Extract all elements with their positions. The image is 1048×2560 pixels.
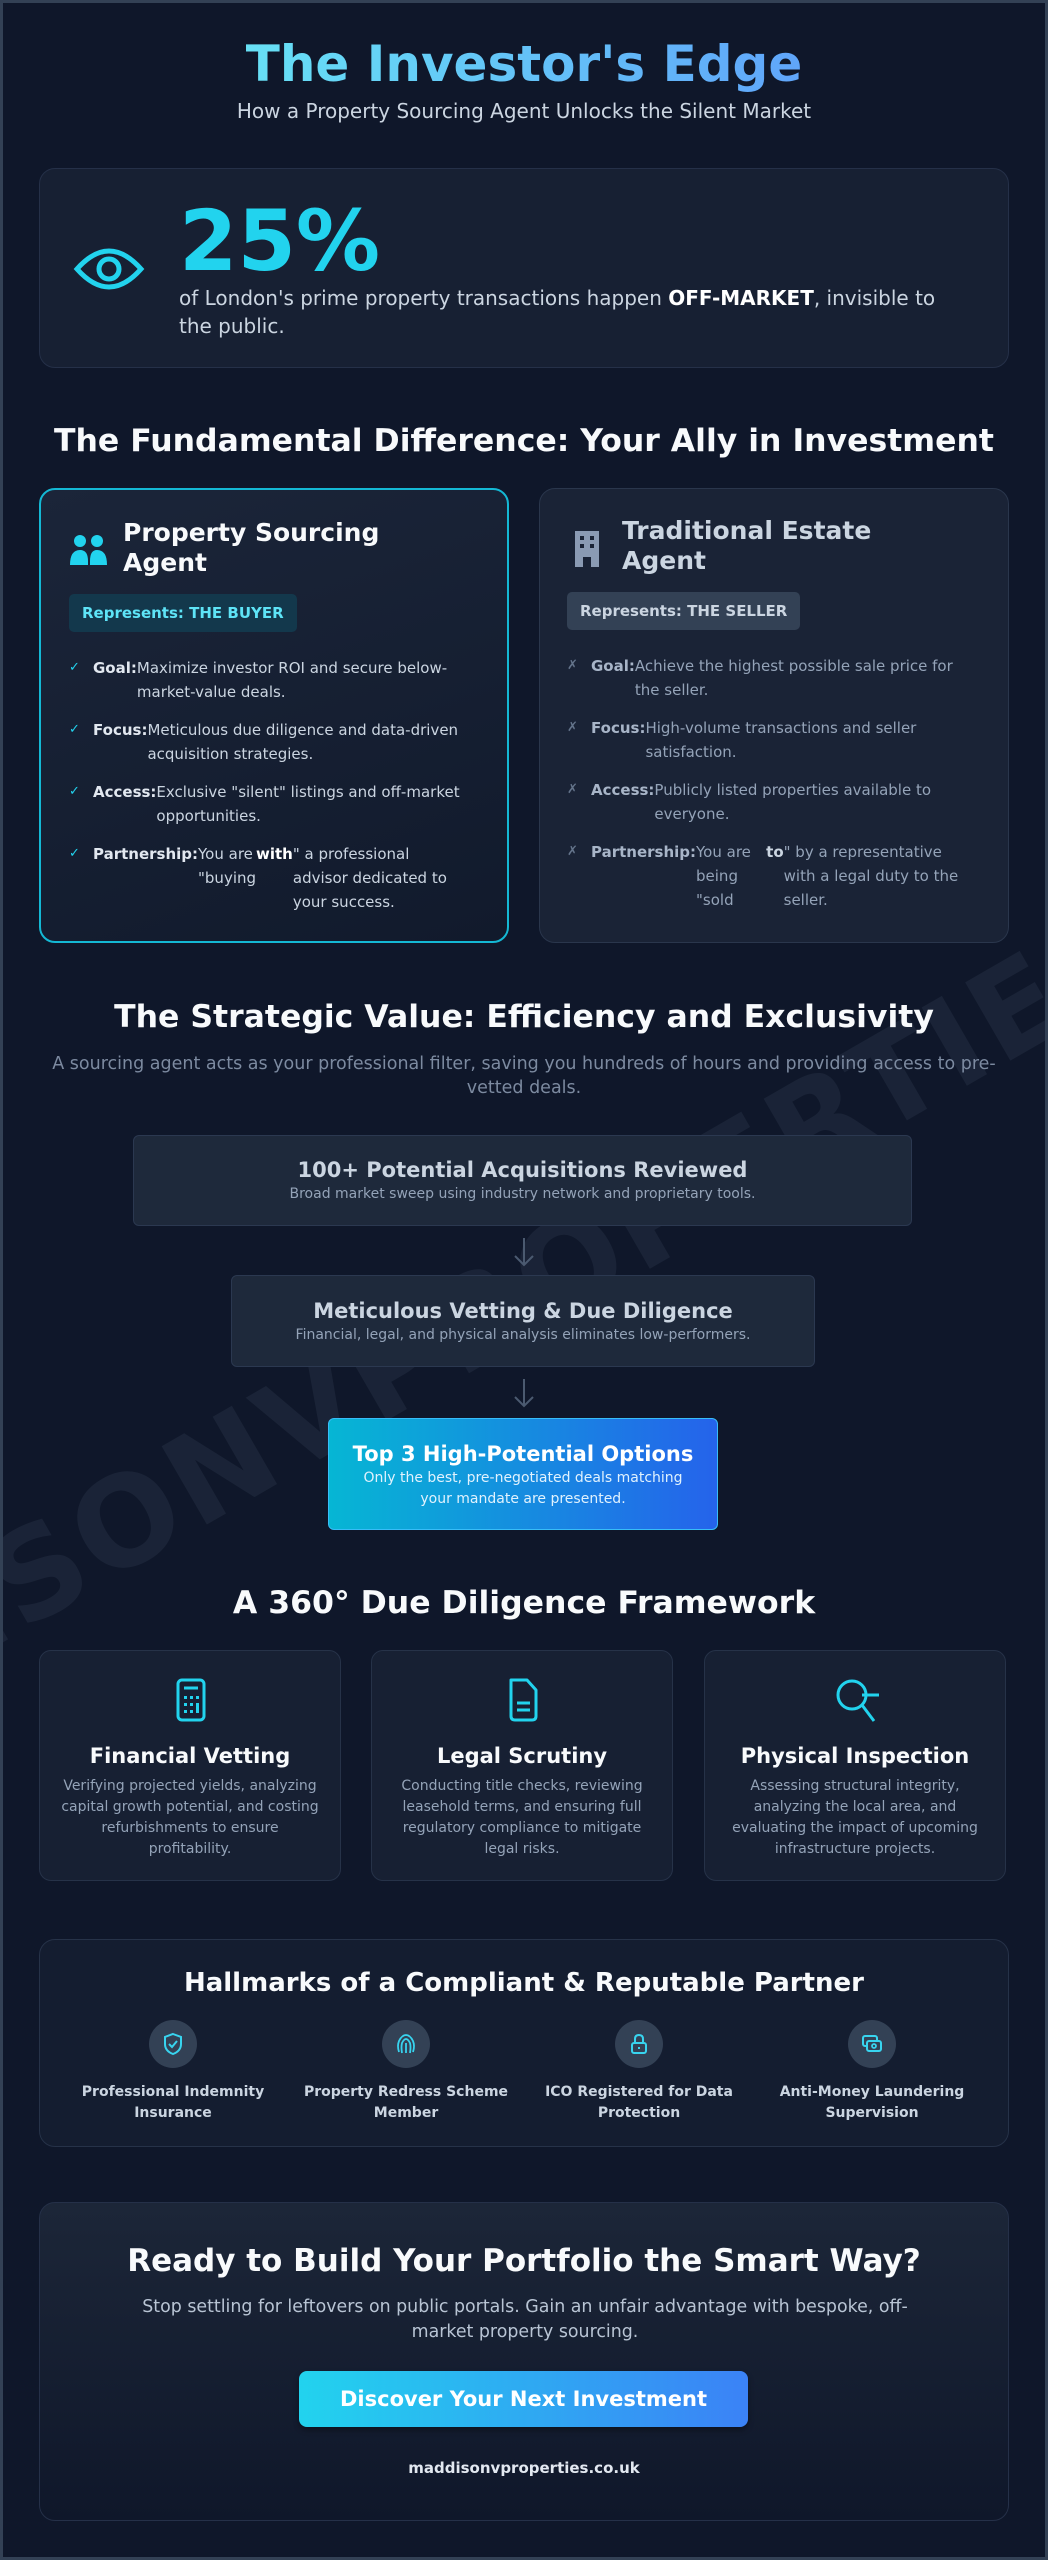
panel: traditional estate agent bbox=[539, 488, 1009, 943]
hallmark: redress scheme bbox=[304, 2020, 508, 2121]
icon: search bbox=[836, 1680, 879, 1722]
list: buyer benefits: Maximize investor ROI and secure below-market-value deals. bbox=[137, 659, 447, 701]
badge: Represents: THE SELLER bbox=[580, 602, 787, 620]
subtitle: How a Property Sourcing Agent Unlocks the Silent Market bbox=[237, 99, 811, 123]
card: legal scrutiny bbox=[371, 1650, 673, 1881]
heading: 360 framework: A 360° Due Diligence Framework bbox=[233, 1585, 815, 1621]
icon: document bbox=[510, 1678, 538, 1722]
list: seller focus: Achieve the highest possible sale price for the seller. bbox=[635, 657, 953, 699]
heading: fundamental difference: The Fundamental Difference: Your Ally in Investment bbox=[54, 423, 994, 459]
card title: Agent bbox=[123, 548, 207, 577]
funnel step 3: Only the best, pre-negotiated deals matching your mandate are presented. bbox=[363, 1470, 683, 1507]
card title: Agent bbox=[622, 546, 706, 575]
list: seller focus: Publicly listed properties available to everyone. bbox=[654, 781, 931, 823]
funnel step 3 bbox=[328, 1418, 718, 1530]
list: seller focus: High-volume transactions and seller satisfaction. bbox=[645, 719, 916, 761]
heading: strategic value: The Strategic Value: Efficiency and Exclusivity bbox=[114, 999, 934, 1035]
funnel step 1: Broad market sweep using industry network and proprietary tools. bbox=[290, 1186, 756, 1202]
icon: users bbox=[70, 535, 107, 565]
CTA heading: Ready to Build Your Portfolio the Smart Way? bbox=[127, 2243, 921, 2279]
title: The Investor's Edge bbox=[246, 35, 802, 93]
list: buyer benefits: Access: bbox=[93, 783, 156, 801]
funnel step 2: Financial, legal, and physical analysis eliminates low-performers. bbox=[296, 1327, 750, 1343]
list: seller focus: Partnership: bbox=[591, 843, 696, 861]
panel: call to action bbox=[39, 2202, 1009, 2521]
list: buyer benefits: You are "buying " a professional advisor dedicated to your success. bbox=[198, 845, 447, 911]
hallmark: redress scheme: Property Redress Scheme Member bbox=[304, 2084, 508, 2121]
card: physical inspection: Assessing structural integrity, analyzing the local area, and evaluating the impact of upcoming infrastructure projects. bbox=[732, 1778, 978, 1857]
icon: building bbox=[575, 531, 599, 567]
list: seller focus: ✗ bbox=[567, 782, 578, 797]
card: legal scrutiny: Legal Scrutiny bbox=[437, 1744, 607, 1768]
funnel step 2 bbox=[231, 1275, 815, 1367]
arrow bbox=[514, 1379, 534, 1408]
list: buyer benefits: ✓ bbox=[69, 784, 80, 799]
icon: eye bbox=[74, 248, 144, 290]
stat number: 25% bbox=[179, 192, 380, 290]
card: financial vetting: Verifying projected yields, analyzing capital growth potential, and costing refurbishments to ensure profitability. bbox=[61, 1778, 319, 1857]
funnel step 1 bbox=[133, 1135, 912, 1226]
list: seller focus bbox=[567, 657, 958, 909]
stat card bbox=[39, 168, 1009, 368]
list: seller focus: ✗ bbox=[567, 844, 578, 859]
card: financial vetting bbox=[39, 1650, 341, 1881]
badge bbox=[567, 592, 800, 630]
card: physical inspection bbox=[704, 1650, 1006, 1881]
list: seller focus: You are being "sold " by a representative with a legal duty to the seller. bbox=[696, 843, 958, 909]
hallmark: AML: Anti-Money Laundering Supervision bbox=[780, 2084, 964, 2121]
badge: Represents: THE BUYER bbox=[82, 604, 284, 622]
hallmark: indemnity: Professional Indemnity Insurance bbox=[82, 2084, 264, 2121]
list: buyer benefits: Meticulous due diligence and data-driven acquisition strategies. bbox=[147, 721, 458, 763]
card title bbox=[123, 518, 379, 577]
list: buyer benefits: ✓ bbox=[69, 722, 80, 737]
card: legal scrutiny: Conducting title checks, reviewing leasehold terms, and ensuring full regulatory compliance to mitigate legal risks. bbox=[401, 1778, 643, 1857]
stat text: of London's prime property transactions happen OFF-MARKET, invisible to the public. bbox=[179, 286, 935, 338]
intro text: A sourcing agent acts as your professional filter, saving you hundreds of hours and providing access to pre-vetted deals. bbox=[52, 1054, 996, 1098]
hallmark: indemnity bbox=[82, 2020, 264, 2121]
arrow bbox=[514, 1238, 534, 1266]
list: buyer benefits bbox=[69, 659, 460, 911]
card: physical inspection: Physical Inspection bbox=[741, 1744, 969, 1768]
card title bbox=[622, 516, 871, 575]
CTA button: Discover Your Next Investment bbox=[340, 2387, 707, 2411]
list: buyer benefits: Goal: bbox=[93, 659, 137, 677]
list: seller focus: Focus: bbox=[591, 719, 645, 737]
funnel step 1: 100+ Potential Acquisitions Reviewed bbox=[298, 1158, 747, 1182]
panel: property sourcing agent bbox=[39, 488, 509, 943]
funnel step 3: Top 3 High-Potential Options bbox=[353, 1442, 693, 1466]
list: seller focus: ✗ bbox=[567, 720, 578, 735]
list: seller focus: to bbox=[766, 843, 784, 861]
icon: calculator bbox=[176, 1678, 206, 1722]
list: seller focus: Goal: bbox=[591, 657, 635, 675]
badge bbox=[69, 594, 297, 632]
hallmark: ICO bbox=[545, 2020, 733, 2121]
CTA text: Stop settling for leftovers on public portals. Gain an unfair advantage with bespoke, off-market property sourcing. bbox=[142, 2297, 908, 2342]
website: maddisonvproperties.co.uk bbox=[408, 2459, 640, 2477]
list: buyer benefits: Partnership: bbox=[93, 845, 198, 863]
list: buyer benefits: with bbox=[256, 845, 293, 863]
list: buyer benefits: ✓ bbox=[69, 660, 80, 675]
funnel step 2: Meticulous Vetting & Due Diligence bbox=[313, 1299, 733, 1323]
list: seller focus: ✗ bbox=[567, 658, 578, 673]
card title: Traditional Estate bbox=[622, 516, 871, 545]
list: buyer benefits: Focus: bbox=[93, 721, 147, 739]
list: buyer benefits: Exclusive "silent" listings and off-market opportunities. bbox=[156, 783, 460, 825]
card title: Property Sourcing bbox=[123, 518, 379, 547]
card: financial vetting: Financial Vetting bbox=[90, 1744, 290, 1768]
hallmark: ICO: ICO Registered for Data Protection bbox=[545, 2084, 733, 2121]
list: buyer benefits: ✓ bbox=[69, 846, 80, 861]
heading: Hallmarks of a Compliant & Reputable Partner bbox=[184, 1968, 864, 1998]
panel: hallmarks bbox=[39, 1939, 1009, 2147]
list: seller focus: Access: bbox=[591, 781, 654, 799]
CTA button bbox=[299, 2371, 748, 2427]
hallmark: AML bbox=[780, 2020, 964, 2121]
